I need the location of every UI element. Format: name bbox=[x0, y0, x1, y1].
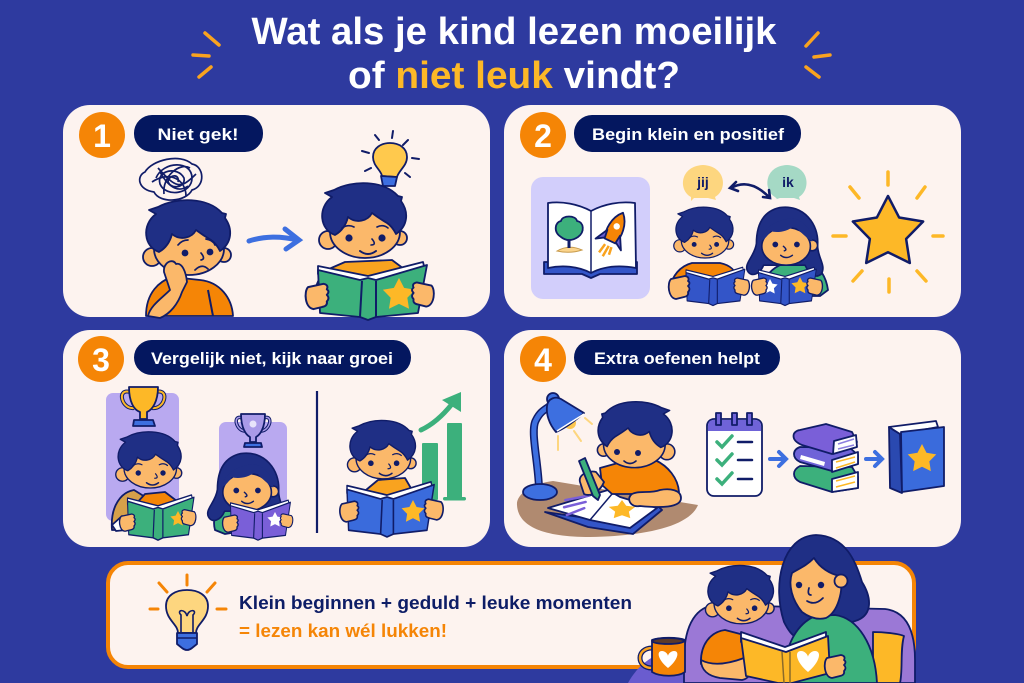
number badge 3 bbox=[78, 336, 124, 382]
banner line 2: = lezen kan wél lukken! bbox=[239, 621, 447, 641]
chart: growth bars bbox=[421, 392, 466, 500]
happy boy with green book bbox=[306, 183, 434, 320]
icon: left title rays bbox=[193, 33, 219, 77]
lavender column short bbox=[219, 422, 287, 520]
arrow bbox=[866, 452, 882, 466]
arrow bbox=[770, 452, 786, 466]
number badge 1: 1 bbox=[93, 118, 111, 154]
icon: checklist bbox=[707, 413, 762, 496]
heading pill 3 bbox=[134, 340, 411, 375]
boy with green book bbox=[112, 432, 196, 540]
panel 4: extra oefenen helpt bbox=[504, 330, 961, 547]
icon: light bulb with rays bbox=[362, 131, 419, 186]
icon: blue star book bbox=[889, 421, 944, 493]
icon: mug bbox=[640, 638, 685, 676]
panel 1: niet gek bbox=[63, 105, 490, 320]
icon: green pen bbox=[579, 458, 600, 500]
boy's blue book bbox=[340, 482, 443, 537]
boy writing bbox=[579, 402, 681, 507]
arrow: two-way bbox=[730, 182, 770, 198]
yellow book bbox=[741, 632, 846, 683]
number badge 4: 4 bbox=[534, 342, 552, 378]
title line 2: of niet leuk vindt? bbox=[348, 55, 680, 97]
divider bbox=[316, 391, 318, 533]
lavender column tall bbox=[106, 393, 179, 521]
banner line 1: Klein beginnen + geduld + leuke momenten bbox=[239, 593, 632, 613]
heading pill 1 bbox=[134, 115, 263, 152]
speech bubble ik bbox=[767, 165, 807, 200]
heading pill 3: Vergelijk niet, kijk naar groei bbox=[151, 349, 393, 368]
panel 2: begin klein en positief bbox=[504, 105, 961, 317]
heading pill 1: Niet gek! bbox=[158, 125, 238, 144]
cushion bbox=[873, 632, 904, 683]
icon: star with rays bbox=[833, 172, 943, 292]
number badge 2: 2 bbox=[534, 118, 552, 154]
desk bbox=[517, 481, 698, 537]
icon: tree bbox=[556, 216, 583, 252]
title: Wat als je kind lezen moeilijk bbox=[252, 11, 777, 53]
speech bubble jij: jij bbox=[696, 174, 709, 190]
number badge 1 bbox=[79, 112, 125, 158]
icon: desk lamp bbox=[523, 393, 592, 500]
child bbox=[701, 565, 774, 680]
heading pill 4: Extra oefenen helpt bbox=[594, 349, 760, 368]
panel 3: vergelijk niet bbox=[63, 330, 490, 547]
icon: stack of books bbox=[794, 424, 858, 492]
girl with purple book bbox=[208, 453, 293, 540]
heading pill 2 bbox=[574, 115, 801, 152]
banner: conclusion bbox=[108, 563, 914, 667]
heading pill 2: Begin klein en positief bbox=[592, 125, 784, 144]
icon: purple trophy bbox=[236, 414, 270, 447]
number badge 3: 3 bbox=[92, 342, 110, 378]
sad boy bbox=[143, 200, 233, 318]
number badge 4 bbox=[520, 336, 566, 382]
heading pill 4 bbox=[574, 340, 780, 375]
mother bbox=[779, 535, 877, 683]
icon: scribble bbox=[140, 159, 202, 200]
boy with blue book bbox=[669, 207, 749, 306]
number badge 2 bbox=[520, 112, 566, 158]
arrow: progress bbox=[249, 229, 299, 249]
icon: gold trophy bbox=[122, 387, 164, 426]
icon: rocket bbox=[590, 207, 636, 262]
picture book card bbox=[531, 177, 650, 299]
illustration: parent and child on sofa bbox=[628, 535, 915, 683]
boy with blue book bbox=[347, 420, 416, 510]
book on desk bbox=[545, 490, 662, 534]
icon: lightbulb bbox=[150, 575, 226, 650]
girl with blue book bbox=[747, 207, 828, 306]
speech bubble ik: ik bbox=[782, 174, 794, 190]
speech bubble jij bbox=[683, 165, 723, 201]
icon: right title rays bbox=[806, 33, 830, 77]
